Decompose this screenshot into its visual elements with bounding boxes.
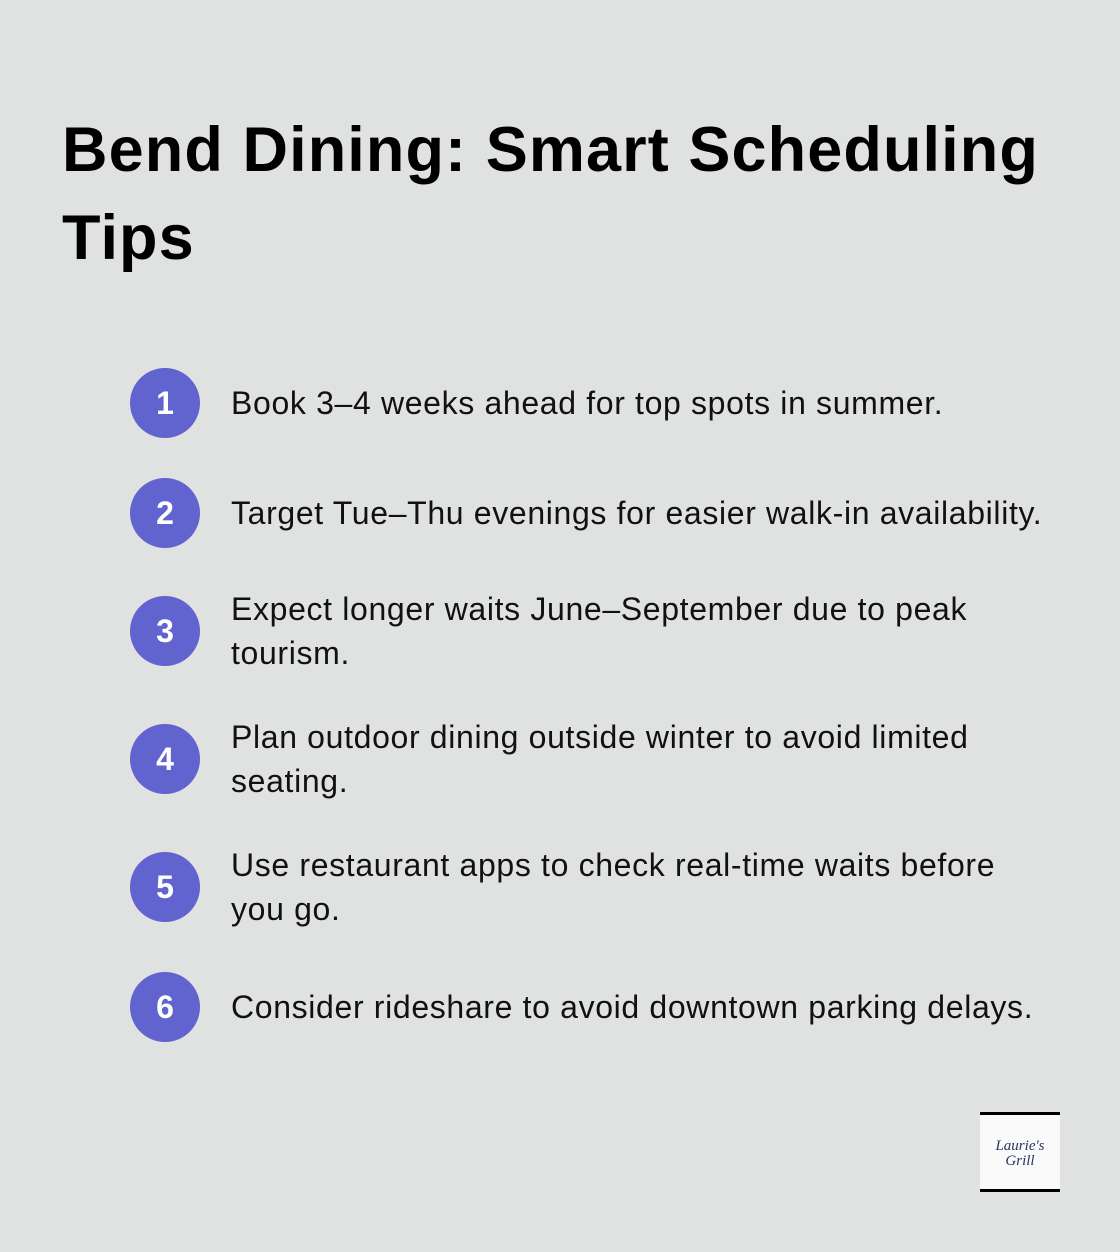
tip 1: 1	[156, 385, 174, 421]
tip 1: Book 3–4 weeks ahead for top spots in summer.	[231, 385, 943, 421]
tip 1	[130, 368, 943, 438]
tip 4: Plan outdoor dining outside winter to avoid limited seating.	[231, 719, 969, 799]
tip 5: 5	[156, 869, 174, 905]
tip 6: Consider rideshare to avoid downtown parking delays.	[231, 989, 1033, 1025]
tip 4: 4	[156, 741, 174, 777]
logo	[980, 1112, 1060, 1192]
logo: Grill	[1005, 1153, 1035, 1169]
tip 3: Expect longer waits June–September due to peak tourism.	[231, 591, 967, 671]
tip 6	[130, 972, 1033, 1042]
title: Bend Dining: Smart Scheduling Tips	[62, 115, 1039, 273]
tip 5: Use restaurant apps to check real-time waits before you go.	[231, 847, 995, 927]
tip 6: 6	[156, 989, 174, 1025]
tip 2: 2	[156, 495, 174, 531]
logo: Laurie's	[995, 1138, 1045, 1154]
tip 2: Target Tue–Thu evenings for easier walk-in availability.	[231, 495, 1042, 531]
tip 2	[130, 478, 1042, 548]
tip 3: 3	[156, 613, 174, 649]
